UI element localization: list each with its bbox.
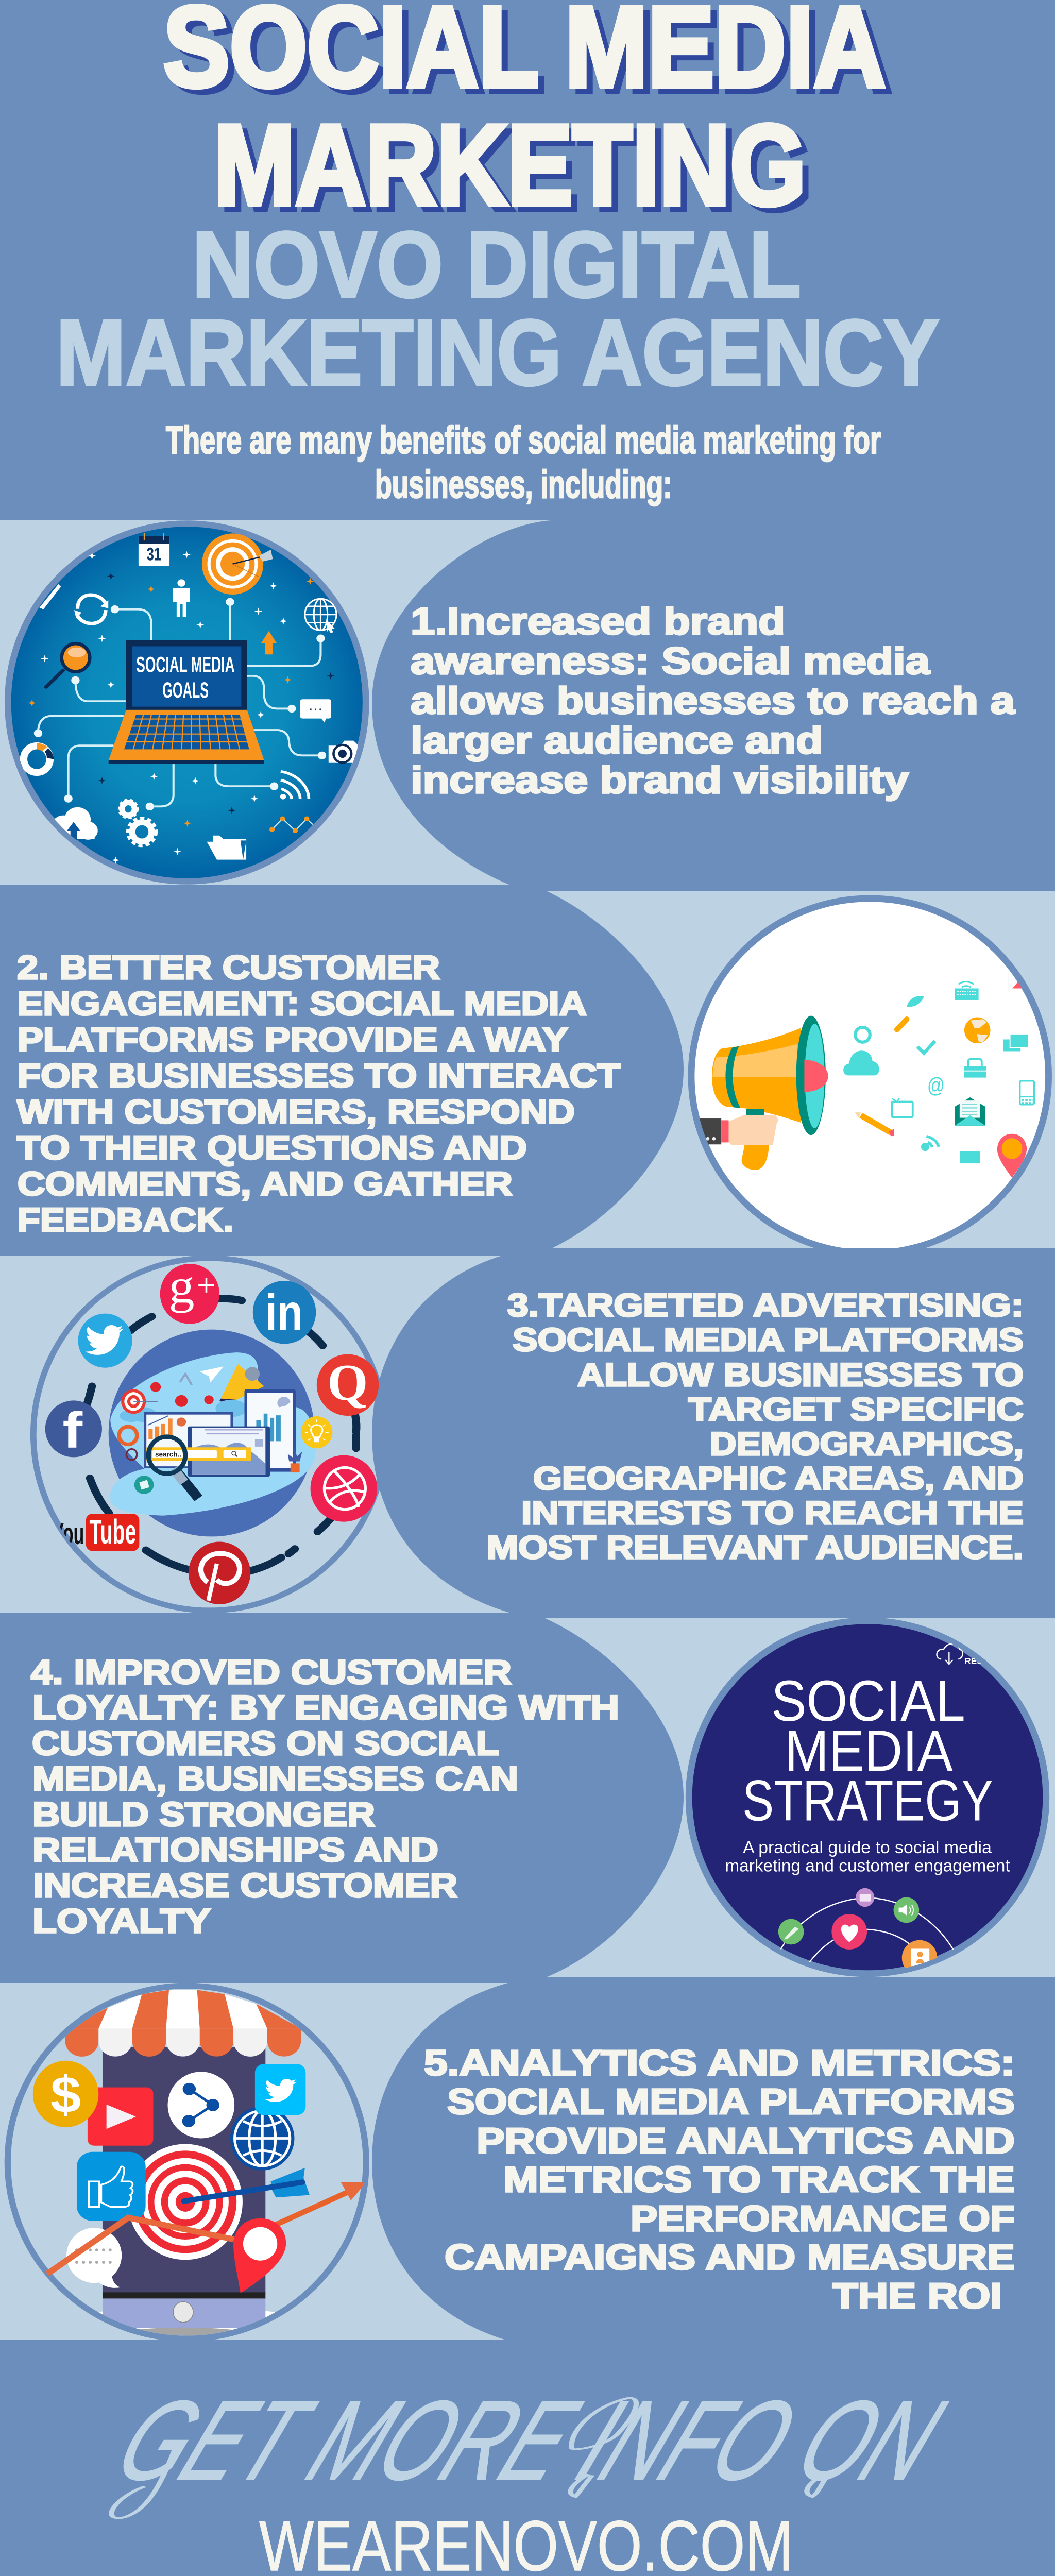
- intro text: [166, 418, 881, 506]
- text: improved customer loyalty: RELATIONSHIPS AND: [32, 1831, 438, 1869]
- subtitle: novo digital marketing agency: NOVO DIGITAL: [192, 213, 801, 317]
- panel: increased brand awareness: [0, 520, 1055, 885]
- text: analytics and metrics: 5.ANALYTICS AND METRICS:: [424, 2043, 1015, 2083]
- text: targeted advertising: INTERESTS TO REACH THE: [521, 1495, 1024, 1531]
- icons overlapping panel edge: quora and dribbble: Q: [327, 1354, 368, 1411]
- icon: speech bubble: [66, 2228, 122, 2288]
- text: increased brand awareness: increase brand visibility: [411, 759, 909, 801]
- text: targeted advertising: [487, 1287, 1024, 1566]
- icon: google plus: g: [169, 1259, 195, 1313]
- text: targeted advertising: GEOGRAPHIC AREAS, AND: [533, 1461, 1024, 1497]
- text: targeted advertising: TARGET SPECIFIC: [688, 1392, 1024, 1428]
- text: targeted advertising: SOCIAL MEDIA PLATFORMS: [513, 1322, 1024, 1358]
- icon: youtube: Tube: [89, 1512, 136, 1551]
- icon: social media strategy book cover: [689, 1621, 1046, 1976]
- text: improved customer loyalty: CUSTOMERS ON SOCIAL: [32, 1724, 499, 1762]
- text: analytics and metrics: PERFORMANCE OF: [631, 2198, 1015, 2239]
- text: improved customer loyalty: LOYALTY: BY ENGAGING WITH: [32, 1688, 619, 1726]
- text: analytics and metrics: SOCIAL MEDIA PLATFORMS: [447, 2081, 1015, 2122]
- icon: pinterest: [189, 1541, 250, 1604]
- icon: social media goals laptop illustration: 31: [147, 544, 161, 564]
- text: improved customer loyalty: BUILD STRONGER: [32, 1795, 375, 1833]
- icon: social media strategy book cover: RES: [964, 1656, 983, 1666]
- text: improved customer loyalty: [31, 1653, 619, 1940]
- text: better customer engagement: WITH CUSTOMERS, RESPOND: [17, 1093, 575, 1130]
- text: increased brand awareness: 1.Increased brand: [411, 601, 785, 642]
- icon: social media goals laptop illustration: GOALS: [162, 678, 209, 703]
- icon: twitter: [78, 1314, 132, 1368]
- text: improved customer loyalty: LOYALTY: [32, 1902, 211, 1940]
- icon: target with arrow: [128, 2144, 310, 2260]
- icon: youtube: You: [53, 1517, 84, 1551]
- text: improved customer loyalty: INCREASE CUSTOMER: [33, 1866, 457, 1904]
- icon: share: [168, 2072, 234, 2138]
- text: better customer engagement: ENGAGEMENT: SOCIAL MEDIA: [18, 985, 587, 1022]
- icon: megaphone illustration: @: [927, 1073, 945, 1097]
- icon: social media goals laptop illustration: [8, 523, 366, 882]
- text: targeted advertising: MOST RELEVANT AUDIENCE.: [487, 1530, 1024, 1566]
- panel: analytics and metrics: [0, 1983, 1055, 2343]
- icon: social networks ring illustration: search..: [155, 1450, 181, 1458]
- text: improved customer loyalty: MEDIA, BUSINESSES CAN: [32, 1759, 518, 1798]
- text: analytics and metrics: PROVIDE ANALYTICS AND: [477, 2121, 1015, 2161]
- icon: linkedin: in: [265, 1284, 303, 1341]
- icon: facebook: f: [62, 1402, 82, 1459]
- text: analytics and metrics: CAMPAIGNS AND MEASURE: [445, 2237, 1015, 2277]
- text: better customer engagement: 2. BETTER CUSTOMER: [17, 948, 440, 986]
- icon: megaphone illustration: [688, 895, 1052, 1248]
- panel: targeted advertising: [0, 1256, 1055, 1613]
- icon: social media strategy book cover: SOCIAL: [771, 1668, 965, 1733]
- text: analytics and metrics: [424, 2043, 1015, 2316]
- panel: improved customer loyalty: [0, 1618, 1055, 1977]
- icon: globe: [230, 2106, 294, 2171]
- text: analytics and metrics: THE ROI: [832, 2276, 1002, 2316]
- icon: social media goals laptop illustration: SOCIAL MEDIA: [136, 653, 235, 677]
- icon: video play: [88, 2087, 153, 2146]
- text: targeted advertising: 3.TARGETED ADVERTISING:: [507, 1287, 1024, 1324]
- text: increased brand awareness: [411, 601, 1016, 801]
- icons overlapping panel edge: quora and dribbble: [311, 1354, 379, 1522]
- icon: google plus: [160, 1259, 219, 1324]
- icon: facebook: [45, 1400, 102, 1459]
- subtitle: novo digital marketing agency: [56, 213, 939, 405]
- text: increased brand awareness: larger audience and: [411, 720, 823, 761]
- text: analytics and metrics: METRICS TO TRACK THE: [503, 2159, 1015, 2199]
- icon: dollar coin: [33, 2061, 98, 2127]
- text: increased brand awareness: awareness: Social media: [411, 640, 931, 682]
- arrow: growth line: [47, 2182, 363, 2274]
- icon: twitter: [255, 2064, 305, 2115]
- icon: social networks ring illustration: [33, 1258, 385, 1611]
- icon: dollar coin: $: [50, 2066, 81, 2124]
- text: better customer engagement: FOR BUSINESSES TO INTERACT: [18, 1057, 620, 1094]
- icon: location pin: [233, 2218, 286, 2293]
- text: better customer engagement: PLATFORMS PROVIDE A WAY: [18, 1021, 568, 1058]
- text: better customer engagement: FEEDBACK.: [18, 1201, 233, 1239]
- text: targeted advertising: ALLOW BUSINESSES TO: [577, 1357, 1024, 1393]
- text: increased brand awareness: allows businesses to reach a: [411, 680, 1016, 722]
- icon: youtube: [60, 1514, 139, 1551]
- title: social media marketing: MARKETING: [214, 101, 806, 229]
- text: better customer engagement: COMMENTS, AND GATHER: [18, 1165, 513, 1202]
- icon: thumbs up: [77, 2152, 146, 2221]
- icon: mobile marketing shop illustration: [8, 1986, 366, 2343]
- text: better customer engagement: [17, 948, 620, 1239]
- text: improved customer loyalty: 4. IMPROVED CUSTOMER: [31, 1653, 512, 1691]
- icon: social media strategy book cover: STRATEGY: [742, 1768, 993, 1833]
- panel: better customer engagement: [0, 891, 1055, 1273]
- subtitle: novo digital marketing agency: MARKETING AGENCY: [56, 301, 939, 405]
- title: social media marketing: [163, 0, 892, 234]
- icon: social media strategy book cover: marketing and customer engagement: [725, 1857, 1010, 1876]
- text: better customer engagement: TO THEIR QUESTIONS AND: [17, 1129, 527, 1166]
- icon: social media strategy book cover: A practical guide to social media: [743, 1838, 992, 1857]
- title: social media marketing: MARKETING: [220, 107, 812, 234]
- icon: linkedin: [253, 1281, 316, 1344]
- text: targeted advertising: DEMOGRAPHICS,: [710, 1426, 1024, 1462]
- intro text: businesses, including:: [375, 463, 672, 506]
- icon: social media strategy book cover: MEDIA: [785, 1718, 953, 1783]
